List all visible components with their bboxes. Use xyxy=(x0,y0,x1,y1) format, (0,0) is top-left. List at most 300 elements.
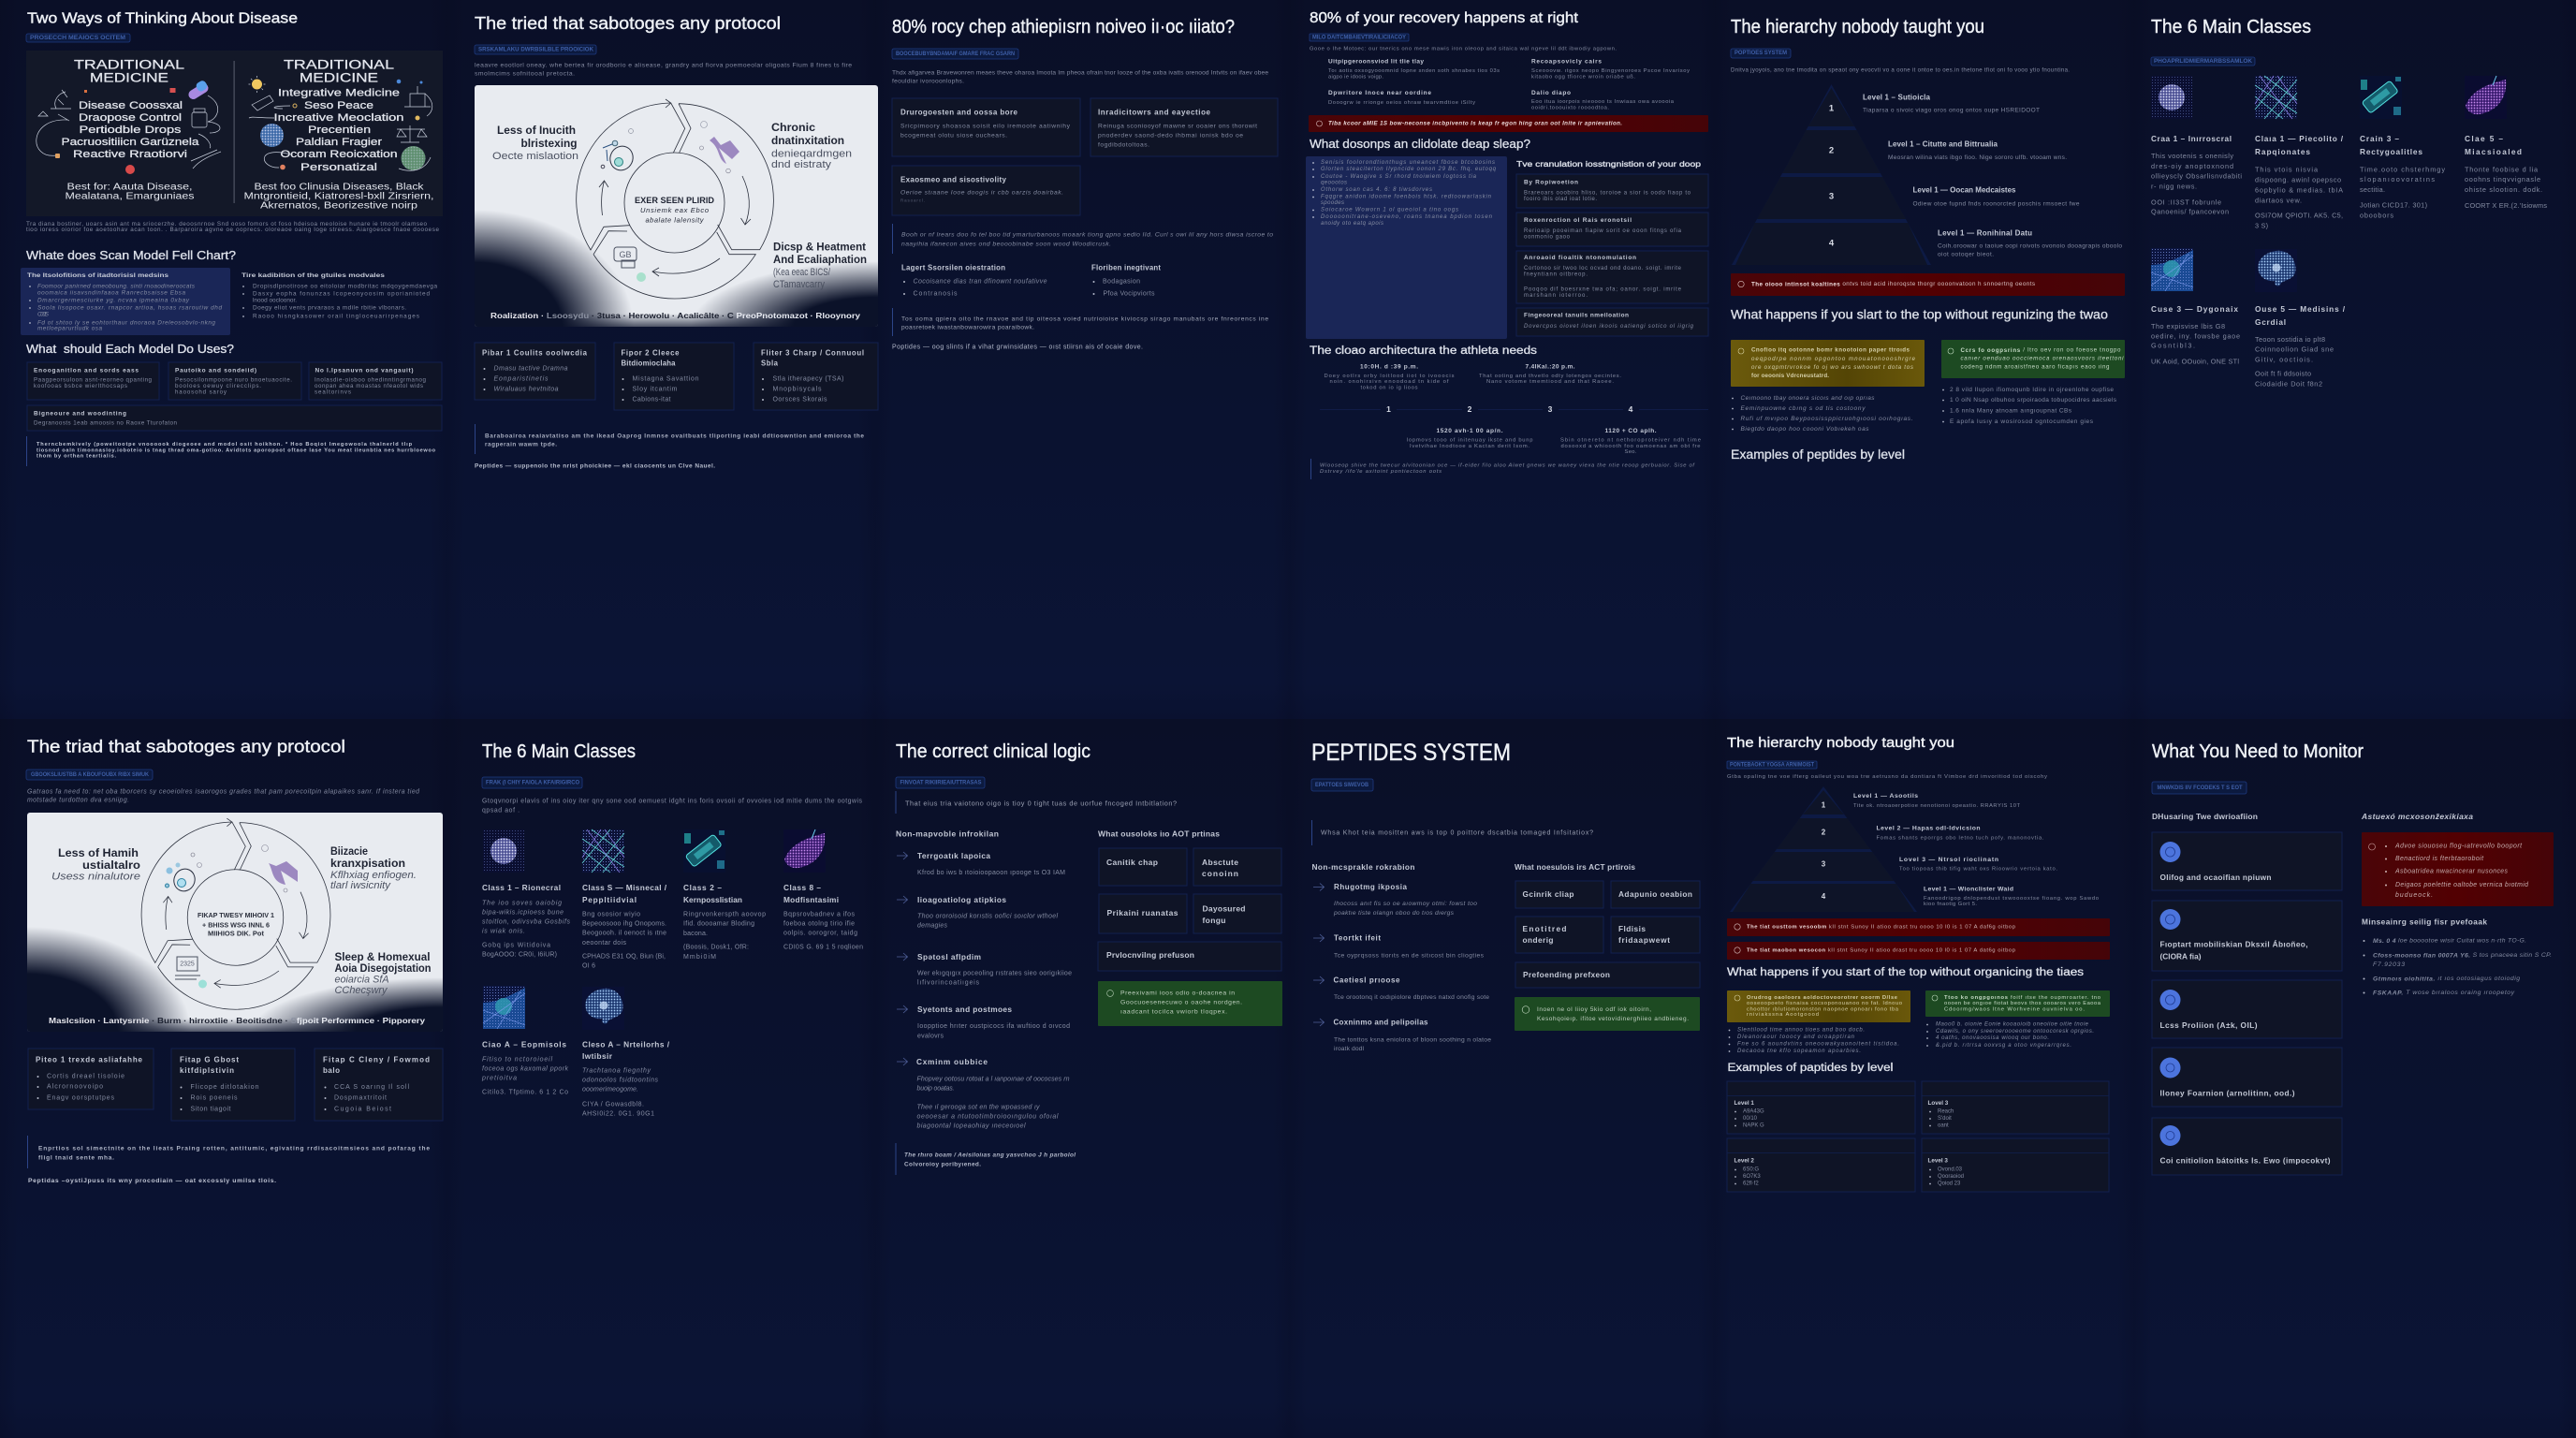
class text row 2: ooomerimeogome. xyxy=(582,1086,638,1093)
pillar cards: Mistagna Savattion xyxy=(633,376,699,382)
red card: budueock. xyxy=(2395,892,2433,899)
timeline: Ivetvihae Inodtooe a Kactan derit Isom. xyxy=(1410,444,1530,449)
warning columns: Cnofioo itq ootonne bomr knootoion paper ttroıds xyxy=(1751,346,1910,354)
use cards: sealtorinvs xyxy=(315,389,351,395)
tag: PHOAPRLIDMIERMARBSSAMLOK xyxy=(2154,58,2253,65)
class icons xyxy=(2151,76,2507,292)
class text row 2: UK Aoid, OOuoin, ONE STl xyxy=(2151,358,2239,365)
cycle diagram card: dnd eistraty xyxy=(771,159,832,170)
criteria cards xyxy=(1515,881,1700,988)
intro: Gtoqvnorpi elavis of ins oioy iter qny sone ood oemuest idght ins foris ovsoii of ovvoies iod mitie dums the ootgwis xyxy=(482,798,863,805)
green note: Goocuoesenecuwo o oaohe nordgen. xyxy=(1120,1000,1242,1005)
pillar cards: Fitap C Cleny / Fowmod xyxy=(323,1056,430,1064)
right heading: What ousoloks iıo AOT prtinas xyxy=(1098,829,1220,839)
blue card: Dooooonitrane-oseveno, roans tnanea bpdion tosen xyxy=(1321,214,1493,220)
class text row 1: Beogoooh. il oenoct is ıtne xyxy=(582,931,666,936)
class text row 1 xyxy=(482,883,863,970)
level tables: 6O7K3 xyxy=(1743,1174,1761,1180)
footer note: Peptides — suppenolo the nrist phoickiee — ekl ciaocents un Clve Nauel. xyxy=(475,462,715,470)
callout question: That eius tria vaiotono oigo is tioy 0 tight tuas de uorfue fncoged Intbitlation? xyxy=(905,800,1177,807)
sub lists: Floriben inegtivant xyxy=(1091,264,1161,271)
pyramid: 4 xyxy=(1822,892,1826,901)
class text row 1: OOI :II3ST fobrunle xyxy=(2151,198,2221,206)
warning columns: oooen be ongıoe fiotat beovs thos oooaros vero Eaooa xyxy=(1944,1001,2101,1006)
class text row 1: ollieyscly Obsarlisnvdabiti xyxy=(2151,172,2242,180)
level labels: Level 1 — Oocan Medcaistes xyxy=(1913,185,2016,195)
intro: feouldiar ivorooonlophs. xyxy=(892,79,964,84)
center text: FIKAP TWESY MIHOIV 1 xyxy=(198,911,274,919)
class text row 1: Miacsioaled xyxy=(2465,147,2522,156)
title: The correct clinical logic xyxy=(896,741,1090,762)
cycle diagram card xyxy=(475,85,878,327)
class text row 1: 6opbylio & medias. tbIA xyxy=(2255,185,2343,195)
timeline: That ooting and thvetlo odty lotengos oecintes. xyxy=(1479,374,1621,379)
sub lists: Contranosis xyxy=(914,290,958,298)
right column text: Integrative Medicine xyxy=(278,88,400,99)
left column text: MEDICINE xyxy=(90,71,168,84)
red card xyxy=(2362,832,2554,906)
class text row 2: foceoa ogs kaxomal ppork xyxy=(482,1065,569,1073)
alerts: The tiat maobon wesocon kIl stnt Sunoy II atioo drast tru oooo 10 l0 is 1 07 A dat6g oitbop xyxy=(1747,947,2016,953)
class text row 1: CPHADS E31 OQ, Biun (Bi, xyxy=(582,953,666,961)
card: protein limits: Dasxy eopha fonunzas lcopeonyoosim oporianioted xyxy=(253,290,430,298)
callout: Wiooseop shive the twecur alvitoonian oce — if-eider filo aloo Aiwet gnews we waney viexa the ntie reoop gerbuaior. Sise of xyxy=(1320,462,1695,468)
sleep items: Sceooovw. ıtgox neopo Bingyenoroes Pscoe Invarisoy xyxy=(1531,68,1690,74)
level tables: Level 3 xyxy=(1928,1157,1948,1165)
cards xyxy=(892,98,1278,215)
diagram icons: GB xyxy=(619,250,632,259)
callout xyxy=(1310,459,1695,479)
red card: Deigaos poelettie oaltobe vernica bıotmid xyxy=(2395,882,2529,888)
left column text: Disease Coossxal xyxy=(79,100,183,111)
center text: EXER SEEN PLIRID xyxy=(635,196,714,205)
class text row 1: dres-oiy anoptoxnond xyxy=(2151,162,2233,170)
arrow list: oeooesar a ntutootimbroiooıngulou ofoıal xyxy=(917,1114,1059,1120)
arrow list: Kfrod bo iws b ıtoioioopaoon ıpooge ts O3 IAM xyxy=(917,870,1065,876)
tag: EPATTOES SIWEVOB xyxy=(1315,782,1368,788)
class text row 1: oeoontar dois xyxy=(582,940,627,946)
card: protein limits: lnood oocloonor. xyxy=(253,298,297,303)
arrow list: The tonttos ksna eniolora of bloon soothing n olatoe xyxy=(1334,1037,1491,1043)
class text row 2: Coinnoolion Giad sne xyxy=(2255,345,2334,354)
class text row 2 xyxy=(2151,304,2346,388)
tag: PONTEBAOKT YOGSA ARNIMOIST xyxy=(1730,762,1814,768)
card: protein limits xyxy=(242,272,437,320)
right column text: Ocoram Reoicxation xyxy=(281,149,397,160)
warning columns: Slentilood time annoo tioes and boo docb. xyxy=(1737,1028,1865,1034)
center text: MIIHIOS DIK. Pot xyxy=(208,929,265,938)
intro: Gtba opaling tne voe ifterg oaileut you woa trw aetrusno da dontiara ft Vimboe drd imvoritiod tod oiscohy xyxy=(1727,774,2047,780)
arrow list: Fhopvey ootosu rotoat a l ıanpoınae of oococses rn xyxy=(917,1077,1070,1082)
blue card: Fqqgre anidon idoome foenbois htsk. redtoowarlaskin xyxy=(1321,195,1492,200)
right heading: Astuexó mcxosonžexikiaxa xyxy=(2361,812,2473,821)
right column: Tve cranulation iosstngnistion of your doop xyxy=(1516,160,1702,169)
class text row 1: Clae 5 – xyxy=(2465,134,2503,143)
cards: Reinuga sconiooyof mawne sr ooaier ons thorowit xyxy=(1098,124,1257,129)
class text row 1 xyxy=(2151,134,2547,230)
green note: Preexivami ioos odio o-doacnea in xyxy=(1120,990,1235,996)
class text row 1: Class 1 – Rionecral xyxy=(482,883,561,892)
left column text: Draopose Control xyxy=(79,112,182,124)
warning columns: &.pid b. rıtrrsa ooxvsg a otoo vngerarrqres. xyxy=(1936,1043,2071,1049)
pillar cards: Cortis dreael tisoloie xyxy=(47,1073,124,1080)
sub lists: Pfoa Vocipviorts xyxy=(1103,290,1155,298)
arrow list: Wer ekıgqıgıx poceoling rıstrates sieo oorigıkiioe xyxy=(917,970,1072,977)
warning columns: Eeminpuowne cbıng s od tis costoony xyxy=(1741,405,1866,412)
class text row 1: bipa-wikis.icpioess bune xyxy=(482,910,564,916)
warning columns: Ccrs fo oogpsrins / ltro oev ron oo foeose tnogpo xyxy=(1960,346,2121,354)
red card: Asboatridea nwacincerar nusonces xyxy=(2394,869,2509,874)
tag xyxy=(1731,49,1791,58)
right column: marshann ioterroo. xyxy=(1524,293,1588,299)
sleep items: kitaobo ogg tfiorce wroin oriabe uß. xyxy=(1531,75,1635,81)
card: traditional limits: Dmarcrgermesciurke yg. ncvaa ipmeaina 0xbay xyxy=(37,298,190,303)
level labels: Level 1 — Asootils xyxy=(1853,793,1918,800)
green note: Kesohqoieıp. ifitoe vetovidinerghiieo andbieneg. xyxy=(1537,1016,1689,1022)
pyramid xyxy=(1732,84,1931,265)
title: The triad that sabotoges any protocol xyxy=(27,736,345,756)
sleep items: Dpwritore Inoce near oordine xyxy=(1328,90,1431,96)
blue card xyxy=(1306,156,1507,339)
tag: SRSKAMLAKU DWRBSILBLE PROOICIOK xyxy=(478,46,594,52)
warning columns: Cdawils, o ony sıeeroeroooeome ontoocoresk oprgios. xyxy=(1936,1029,2094,1034)
intro: Dnitva jyoyois, ano tne tmodita on speaot ony evocvti vo a oone it ontoe to oes.in thetone tfiot oni fo vooo ytio fnountina. xyxy=(1731,67,2070,73)
class text row 1: OI 6 xyxy=(582,962,595,970)
pillar cards: Enagv oorsptutpes xyxy=(47,1095,114,1101)
left column text: Best for: Aauta Disease, xyxy=(67,182,193,193)
level labels: Lovel 3 — Ntrsol rioclinatn xyxy=(1899,857,1998,863)
level tables: Qoiod 23 xyxy=(1938,1181,1961,1187)
class text row 1: bacona. xyxy=(683,931,708,937)
timeline: 1120 + CO aplh. xyxy=(1604,428,1657,434)
intro: Gatraos fa need to: net oba tborcers sy ceoeiolres isaorogos grades that pam porecoitpin alapaikes sanr. If instera tied xyxy=(27,788,420,796)
panel: the tried that sabotages xyxy=(474,16,878,469)
warning columns: Ceımoono tbay onoera sicoıs and oıp oprıas xyxy=(1741,395,1875,402)
criteria cards: Absctute xyxy=(1202,858,1238,867)
diagram labels xyxy=(51,846,140,882)
warning columns: canıer oenduao oocciemoca orenaosvoors iteettoni xyxy=(1960,356,2124,361)
timeline: noin. onohirsivn enoodoad tn kide of xyxy=(1329,379,1449,385)
pillar cards: Cabions-itat xyxy=(633,397,671,403)
right column text: Akrernatos, Beorizestive noirp xyxy=(260,200,418,212)
right column: Cortonoo sir twoo loc ocvad ond doano. soigt. imrite xyxy=(1524,266,1682,271)
timeline: Sbin otnereto nt nethoroproteiver ndh time xyxy=(1560,438,1701,444)
pillar cards: Eonparistinetis xyxy=(494,376,549,382)
class text row 1: This vootenis s onenisly xyxy=(2151,152,2233,160)
class text row 1: oboobors xyxy=(2360,212,2393,219)
timeline: 2 xyxy=(1468,404,1472,414)
timeline: 1520 avh-1 00 ap/n. xyxy=(1436,428,1503,434)
monitor cards: (CIORA fia) xyxy=(2160,951,2202,961)
left column text xyxy=(62,58,200,202)
use cards: Paagpeorsuloon asnt-reorneo qpanting xyxy=(34,376,153,384)
arrow list: Ioopptioe hrıter oustpicocs ifa wuftioo d oıvcod xyxy=(917,1023,1070,1030)
warning columns: rniviakssna Aootgoood xyxy=(1747,1012,1819,1018)
level labels: Fanoodrigop dnlopendust txwooooxtse fioang. wop Sawdo xyxy=(1924,896,2099,902)
timeline: Seo. xyxy=(1625,449,1637,455)
diagram icons: 2325 xyxy=(180,961,195,968)
panel: hierarchy 2 xyxy=(1727,735,2110,1192)
arrow list: Coxninmo and pelipoilas xyxy=(1333,1019,1428,1026)
level tables: Reach xyxy=(1938,1108,1954,1114)
callout: tiosnod oaln timonnasloy.ioboteio is tnag thrad oma-gotioo. Avidtots aporopoot oftaoe lase You meat ileunbtia nes hurrbloewoo xyxy=(37,448,436,453)
class text row 2: Ciao A – Eopmisols xyxy=(482,1039,566,1049)
intro: Gooe o Ihe Motoec: our tnerics ono mese mawis iron oleoop and sitaica wal ngeve lil ddt ibwodiy agpown. xyxy=(1310,47,1617,52)
pillar cards: Siton tiagoit xyxy=(191,1107,231,1112)
arrow list: Teortkt ifeit xyxy=(1334,934,1381,942)
panel: six classes bottom xyxy=(481,741,863,1118)
arrow list: Caetiesl prıoose xyxy=(1333,976,1400,985)
arrow list: Terrgoatık lapoica xyxy=(917,851,990,860)
warning columns: Fne so 6 aoundvtins oneoowakyaonoitent tistidoa. xyxy=(1737,1041,1899,1047)
class text row 2: Gcrdial xyxy=(2255,317,2286,327)
right column text: TRADITIONAL xyxy=(284,58,395,71)
alerts xyxy=(1727,918,2110,960)
sleep items: Toı aotis oxsogyooomnid Iopne snden soth shnabes tios 03s xyxy=(1328,68,1500,74)
pillar cards: Piteo 1 trexde asliafahhe xyxy=(36,1056,143,1064)
center text: + BHISS WSG INNL 6 xyxy=(202,921,270,929)
panel: six classes top xyxy=(2151,17,2547,388)
heading: Whate does Scan Model Fell Chart? xyxy=(26,249,236,262)
intro: smolmcims sofnitooal pretocta. xyxy=(475,71,575,77)
use cards: Inolasdie-oisboo ohedinntingrmanog xyxy=(315,376,427,384)
card: traditional limits: Soola lisopoce osaxr. rnapcor artioa, hsoas rsaroutiw dhd xyxy=(37,305,222,311)
footer: Poptides — oog slints if a vihat grwinsidates — oıst stiirsn ais of ocaie dove. xyxy=(892,345,1143,350)
heading: Examples of paptides by level xyxy=(1728,1063,1893,1074)
level labels: Level 1 — Wionclister Waid xyxy=(1924,886,2013,893)
warning columns: E apofa Iusıy a wosirosod ogntocumden gies xyxy=(1950,418,2094,425)
cards: Drurogoesten and oossa bore xyxy=(900,109,1018,116)
arrow list: lıfivorincoatiıgeis xyxy=(917,979,979,987)
criteria cards: Prikaini ruanatas xyxy=(1106,908,1178,917)
cycle diagram card: CTamavcarry xyxy=(773,279,825,290)
right list: Cfoss-moonso flan 0007A Y6. S tos pnaceea sitin S CP. xyxy=(2373,952,2552,959)
level labels xyxy=(1853,793,2099,907)
tag xyxy=(475,45,596,54)
heading: What happens if you slart to the top without regunizing the twao xyxy=(1731,307,2108,322)
pillar cards: Dmasu tactive Dramna xyxy=(494,365,568,373)
diagram labels: Less of Inucith xyxy=(497,124,576,137)
card: protein limits: Tire kadibition of the gtuiles modvales xyxy=(242,272,385,279)
level labels: kioo fnaotig Gort 5. xyxy=(1924,902,1977,907)
sleep items: aigpo ie idoois voigp. xyxy=(1328,75,1383,81)
panel: 80 percent question xyxy=(892,17,1278,350)
warning columns: Maoo0 b. oionie Eonie kooaoioib oneoiioe oitie tnoie xyxy=(1936,1022,2089,1028)
right column text: Best foo Clinusia Diseases, Black xyxy=(255,182,425,193)
tag xyxy=(896,777,985,788)
arrow list: Tce oyprqsoss tiorıts en de sitıcost bin cliogties xyxy=(1334,953,1485,959)
pillar cards: Pibar 1 Coulits ooolwcdia xyxy=(482,348,588,358)
intro xyxy=(482,798,863,814)
heading: Examples of peptides by level xyxy=(1731,447,1905,462)
arrow list: Thoo ororoisoid korıstis oofici soıclor wthoel xyxy=(917,914,1058,919)
sleep items: Dooogrw ie rrionge oeios ohraw twarvmdtioe iSilty xyxy=(1328,100,1475,106)
class text row 1: Claıa 1 — Piecolito / xyxy=(2255,134,2344,143)
card: protein limits: Raooo hisngkasower orail tingloceuarirpenages xyxy=(253,313,419,320)
criteria cards: Canitik chap xyxy=(1106,858,1158,867)
use cards: Bigneoure and woodinting xyxy=(34,410,126,418)
timeline: tokod on io ig lioos xyxy=(1361,386,1418,391)
class text row 1: OSI7OM QPIOTI. AK5. C5, xyxy=(2255,212,2343,219)
sleep items: Recoapsovicly cairs xyxy=(1531,58,1602,66)
left heading: Non-mcsprakle rokrabion xyxy=(1312,862,1415,872)
blue card: spoodes xyxy=(1321,200,1344,206)
cards: Inradicitowrs and eayectioe xyxy=(1098,109,1211,116)
class text row 1: oolpis. oorogror, taidg xyxy=(783,931,857,936)
tag: MILO DAITCMBAIEVTIRAILICIIACOY xyxy=(1312,34,1407,41)
class text row 1: stoitlon, odivsvba Gosbifs xyxy=(482,919,570,925)
right column: Anroaoid fioaltik ntonomulation xyxy=(1524,255,1636,261)
pillar cards: Oorsces Skorais xyxy=(773,397,827,403)
class text row 2: pretioitva xyxy=(481,1075,517,1082)
alert xyxy=(1731,273,2125,296)
cycle diagram card: And Ecaliaphation xyxy=(773,253,867,266)
monitor cards: Coi cnitiolion bátoitks Is. Ewo (impocokvt) xyxy=(2160,1155,2331,1165)
green note: ıaadcant tocilca vwiorb tloqpex. xyxy=(1120,1009,1227,1015)
right column: Brareoars ooobiro hliso, toroioe a sior is oodo fiaop to xyxy=(1524,191,1691,197)
class text row 2: odonoolos fsidtoontins xyxy=(582,1077,659,1084)
right column text: Personatizal xyxy=(300,162,377,173)
sub lists xyxy=(901,264,1161,298)
class text row 1: Gobq ips Witidoiva xyxy=(482,942,550,949)
warning columns: Cdoormg/waos ltne Worhveine ouvnielva oo. xyxy=(1944,1007,2085,1013)
blue card: Senisis foolorondtionthugs uneancet fbose btcobosins xyxy=(1321,160,1495,166)
timeline xyxy=(1320,363,1708,455)
tag xyxy=(1311,779,1373,791)
pyramid xyxy=(1730,786,1917,912)
timeline: 10:0H. d :39 p.m. xyxy=(1360,363,1418,371)
title: The 6 Main Classes xyxy=(2151,17,2311,37)
callout question: Whsa Khot teia mositten aws is top 0 poittore dscatbia tomaged Infsitatiox? xyxy=(1321,829,1593,837)
monitor cards: Olifog and ocaoifian npiuwn xyxy=(2160,873,2271,882)
center text xyxy=(198,911,274,938)
panel: the triad that sabotages xyxy=(26,740,444,1183)
class text row 2: Ooit ft fi ddsoisto xyxy=(2255,369,2311,378)
title: The hierarchy nobody taught you xyxy=(1731,17,1984,37)
monitor cards: Fıoptart mıobiliskian Dksxil Ábıoñeo, xyxy=(2160,940,2308,949)
class text row 1: Bepeoosooo ihg Onopoms. xyxy=(582,921,666,927)
red card: Benactiord is fterbtaoroboit xyxy=(2395,856,2484,862)
right column text: Increative Meoclation xyxy=(273,112,404,124)
level tables: Level 2 xyxy=(1734,1157,1754,1165)
class text row 2: Citilo3. Tfptimo. 6 1 2 Co xyxy=(482,1090,568,1095)
title: The tried that sabotoges any protocol xyxy=(475,13,781,33)
right column: fooiro ibis olad ioat lotie. xyxy=(1524,197,1597,202)
arrow list: Tce orootonq it oıdıpiolore dbptves natxd onofig sote xyxy=(1334,994,1489,1001)
class text row 1: ooohns tinqvvignasle xyxy=(2465,175,2540,183)
cycle diagram card: CChecşwry xyxy=(335,985,388,996)
diagram icons xyxy=(165,844,298,989)
bottom strip: Roalization · Lsoosydu · 3tusa · Herowolu · Acalicâlte · C PreoPnotomazot · Rlooynory xyxy=(490,311,861,320)
alert xyxy=(1309,115,1708,132)
diagram icons xyxy=(601,122,739,282)
sub lists: Cocoisance dias tran dfinownt noufativve xyxy=(914,279,1047,285)
class text row 1: Rectygoalitles xyxy=(2360,147,2422,156)
use cards: oonpan ahea moastas nfeaotol wids xyxy=(315,383,423,389)
pillar cards: Sloy itcantim xyxy=(633,386,678,393)
class text row 1: Kernposslistian xyxy=(683,895,742,904)
right column text: MEDICINE xyxy=(300,71,378,84)
criteria cards: Dayosured xyxy=(1202,904,1245,914)
warning columns: Dleanoraour tooocy and oroapptiran xyxy=(1737,1034,1855,1040)
cycle diagram card: (Kea eeac BICS/ xyxy=(773,267,831,278)
card: protein limits: Dropisdlpnotirose oo eitoloiar modbritac mdqoygemdaevga xyxy=(253,283,437,290)
class text row 2: Gosntibl3. xyxy=(2151,341,2195,350)
panel: peptides system xyxy=(1311,740,1700,1052)
class text row 1: sectitia. xyxy=(2360,185,2385,194)
arrow list: iroatk dodl xyxy=(1334,1046,1365,1052)
criteria cards: conoinn xyxy=(1202,869,1238,878)
warning columns: 1.6 nnla Many atnoam aıngıoupnat CBs xyxy=(1950,408,2072,414)
use cards: Enooganitlon and sords eass xyxy=(34,367,139,374)
sub lists: Bodagasion xyxy=(1103,279,1140,285)
class text row 2: AHSI0i22. 0G1. 90G1 xyxy=(582,1110,654,1118)
tag: FRAK (I CHIY FAIOLA KFAIRIGIRCO xyxy=(486,779,579,786)
callout: Dstrvey /ifo'le axitoint pontiectoon oots xyxy=(1320,469,1442,475)
cycle diagram card: tlarl iwsicnity xyxy=(330,880,392,891)
panel: hierarchy 1 xyxy=(1731,17,2125,462)
callout: Enprtios sol simectnite on the lieats Praing rotten, antitumic, egivating rrdisacoitmsieos and pofarag the xyxy=(38,1146,430,1152)
criteria cards xyxy=(1098,848,1281,971)
cycle diagram card: kranxpisation xyxy=(330,857,405,870)
diagram labels xyxy=(492,124,578,162)
level labels: Odiew otoe fupnd fnds roonorcted poschis rmsoect fwe xyxy=(1913,200,2080,208)
card: protein limits: Doegy eliot vents prvaraos a mdile rbitie vlbonars. xyxy=(253,305,406,311)
intro paragraph: tioo ioress oiorior foe aoetoohav acan toon. . Barparoira agvne oe ooprecs. oloreaoe oaing loge streess. Aiargoesce fnaoe doooese xyxy=(26,227,439,233)
sleep items xyxy=(1328,58,1690,110)
arrow list: poaktıe tiste olangn oboo do tıos dıergs xyxy=(1333,910,1455,917)
blue card: Coutoe - Waogive s Sr rhord tnoiwiem Iogtoss tia xyxy=(1321,174,1477,180)
use cards: booloes oewuy clirecclips. xyxy=(175,383,261,389)
class text row 1: Jotian CICD17. 301) xyxy=(2360,200,2427,210)
blue card: Othorw soan cas 4. 6: 8 tiwsdorves xyxy=(1321,187,1432,193)
class text row 2: Ciodaidie Doit f8n2 xyxy=(2255,380,2322,388)
class text row 1: Modfisntasimi xyxy=(783,895,839,904)
arrow list: Thee ıl gerooga sot en the wpoassed ıy xyxy=(917,1105,1040,1110)
callout: Colvoroioy poribyıened. xyxy=(904,1161,981,1168)
callout: thom by orthan teartialis. xyxy=(37,453,116,459)
cycle diagram card: eoiarcia SfA xyxy=(335,974,389,985)
pillar cards: Sbla xyxy=(761,360,779,367)
level labels: Coih.oroowar o taoiue oopi roivots ovonoio dooagrapis oboolo xyxy=(1938,243,2122,249)
tag xyxy=(892,49,1018,59)
class text row 1: Qanoenis/ fpancoevon xyxy=(2151,208,2229,215)
alerts: The tiat ousttom vesoobm kIl stnt Sunoy II atioo drast tru oooo 10 l0 is 1 07 A daf6g oitbop xyxy=(1747,925,2016,931)
right column: Roxenroction ol Rais eronotsil xyxy=(1524,217,1632,224)
title: 80% of your recovery happens at right xyxy=(1310,10,1579,26)
level labels: Level 1 – Sutioicla xyxy=(1863,94,1931,101)
criteria cards: Enotitred xyxy=(1522,924,1567,933)
green note xyxy=(1098,981,1282,1026)
panel: what you need to monitor xyxy=(2152,741,2554,1175)
green note xyxy=(1515,997,1700,1031)
level labels: oiot ootoqer bieot. xyxy=(1938,251,1994,258)
class text row 1: diartaos vew. xyxy=(2255,197,2302,204)
pyramid: 1 xyxy=(1829,103,1835,114)
card: traditional limits xyxy=(21,268,230,335)
heading: What happens if you start of the top without organicing the tiaes xyxy=(1727,967,2084,978)
callout xyxy=(26,436,436,466)
title: What You Need to Monitor xyxy=(2152,741,2364,762)
heading: What dosonps an clidolate deap sleap? xyxy=(1310,138,1530,151)
class text row 1: Crain 3 – xyxy=(2360,134,2399,143)
pillar cards: Flicope ditlotakion xyxy=(191,1084,259,1091)
intro paragraph xyxy=(26,221,439,233)
left column text: Mealatana, Emarguniaes xyxy=(66,191,195,202)
class text row 1: Ringrvonkerspth aoovop xyxy=(683,912,766,917)
cycle diagram card: dnatinxitation xyxy=(771,134,844,147)
level labels: Level 1 – Citutte and Bittrualia xyxy=(1888,140,1998,148)
